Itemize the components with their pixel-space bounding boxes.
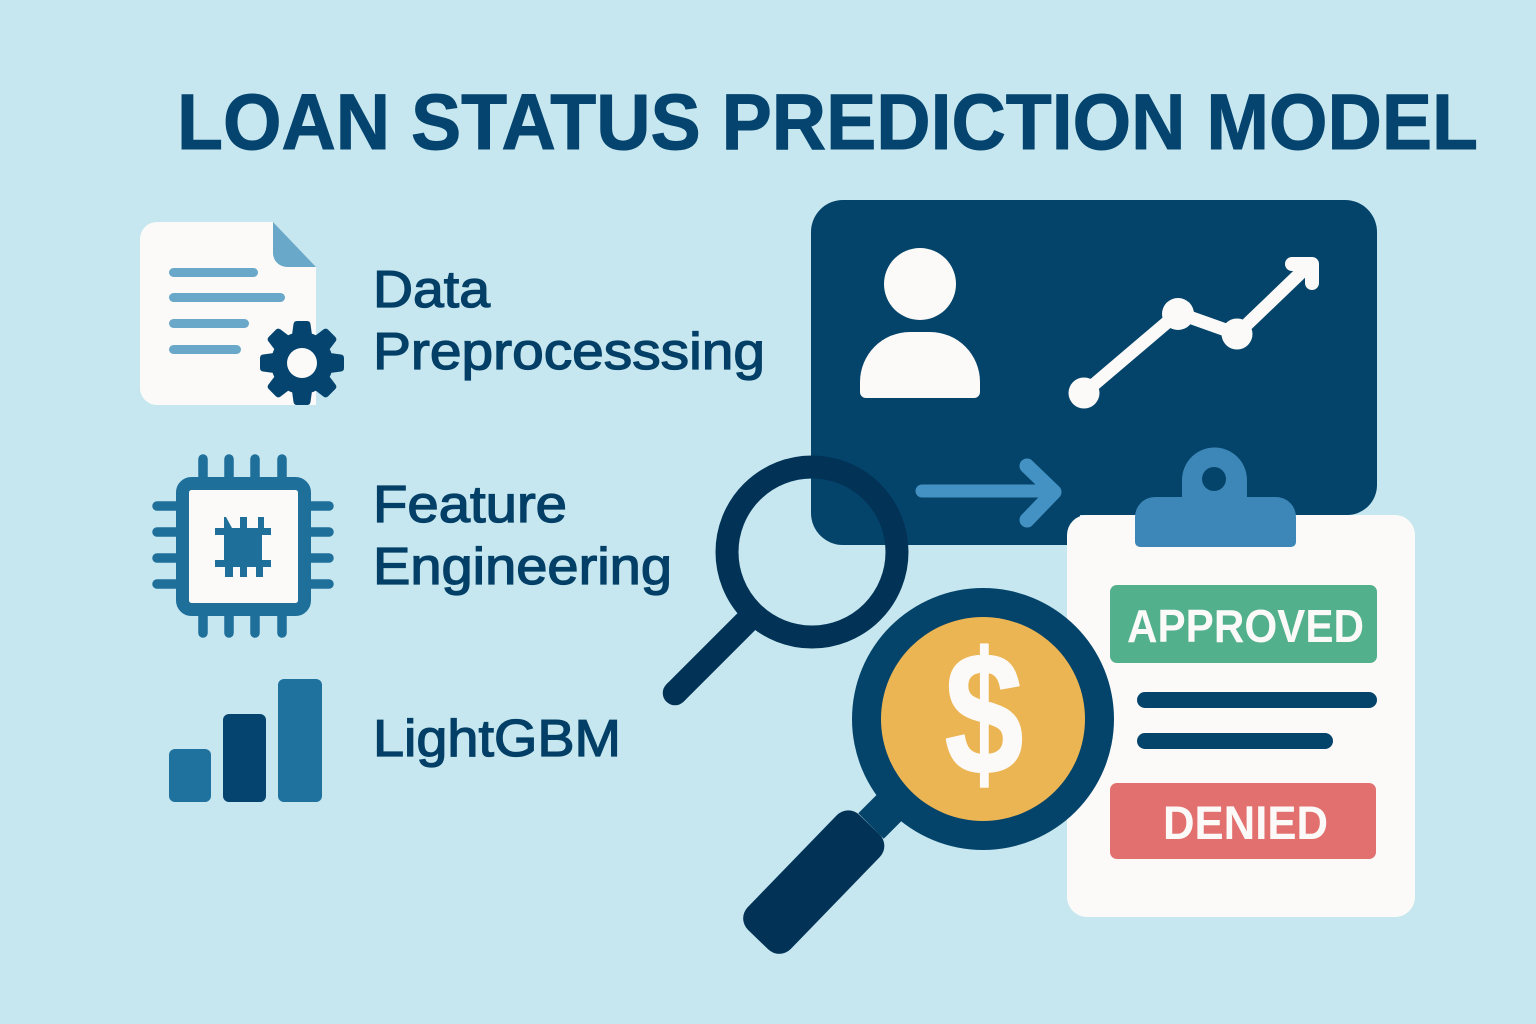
label: feature engineering: Engineering xyxy=(373,538,672,596)
icon: person xyxy=(860,248,980,398)
label: data preprocessing: Preprocesssing xyxy=(373,323,765,381)
document text lines xyxy=(169,268,285,354)
gear xyxy=(260,321,344,405)
label: feature engineering: Feature xyxy=(373,476,567,534)
icon: large magnifying glass with dollar coin xyxy=(737,588,1114,960)
document page xyxy=(140,222,316,405)
denied badge: DENIED xyxy=(1163,796,1328,849)
chip pins xyxy=(157,459,329,633)
icon: document with gear xyxy=(140,222,344,405)
panel: applicant card xyxy=(811,200,1377,545)
denied badge xyxy=(1110,783,1376,859)
chip core xyxy=(215,517,271,577)
dollar sign: $ xyxy=(945,616,1023,811)
handle neck xyxy=(871,797,900,826)
label: lightgbm: LightGBM xyxy=(373,710,621,768)
clipboard paper xyxy=(1067,515,1415,917)
approved badge xyxy=(1110,585,1377,663)
document folded corner xyxy=(273,222,316,267)
chip body xyxy=(182,484,304,610)
clipboard clip xyxy=(1135,448,1296,547)
panel: decision clipboard xyxy=(1067,448,1415,917)
icon: bar chart xyxy=(169,679,322,802)
arrow xyxy=(922,466,1054,520)
icon: small magnifying glass xyxy=(663,467,897,705)
label: data preprocessing xyxy=(373,261,765,381)
icon: microchip xyxy=(157,459,329,633)
summary lines xyxy=(1137,692,1377,749)
label: feature engineering xyxy=(373,476,672,596)
handle grip xyxy=(737,804,891,960)
gold coin xyxy=(881,617,1085,821)
lens ring xyxy=(852,588,1114,850)
approved badge: APPROVED xyxy=(1127,600,1364,652)
card background xyxy=(811,200,1377,545)
title: LOAN STATUS PREDICTION MODEL xyxy=(177,77,1478,166)
clip hole xyxy=(1202,467,1226,491)
icon: rising line chart xyxy=(1068,262,1312,408)
label: data preprocessing: Data xyxy=(373,261,490,319)
